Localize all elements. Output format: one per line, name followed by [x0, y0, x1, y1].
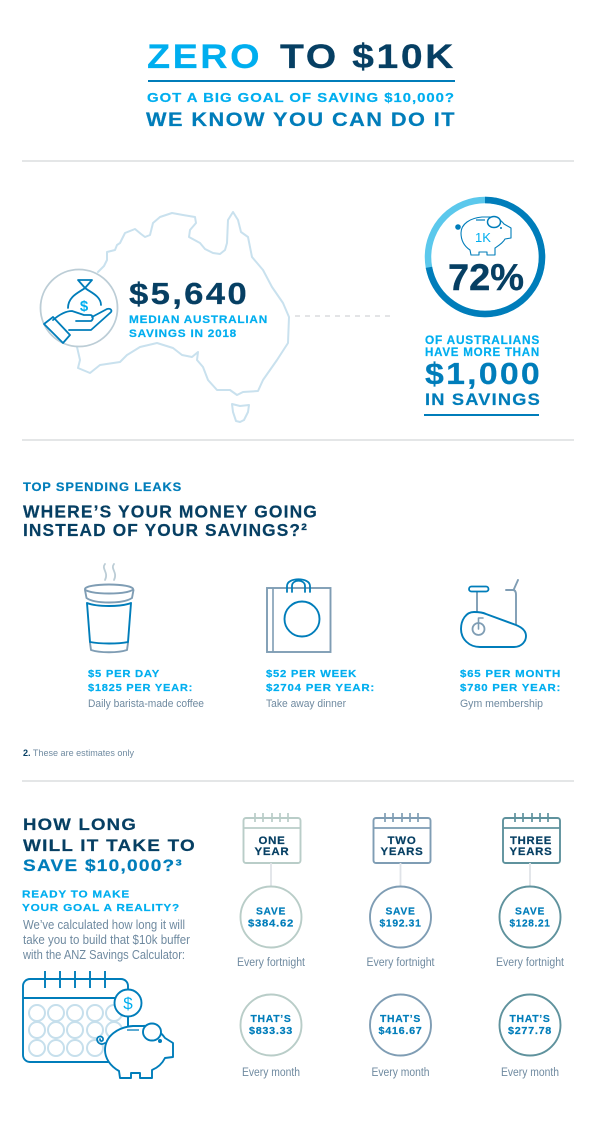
leak: gym: Gym membership [460, 698, 543, 710]
column: three years [496, 813, 565, 1079]
two years fortnightly saving: SAVE [386, 906, 416, 918]
icon: calendar three years: YEARS [510, 846, 552, 858]
savings statistic text: $1,000 [425, 356, 542, 391]
icon: hand holding money bag [40, 270, 118, 346]
three years monthly saving [500, 994, 560, 1079]
icon: shopping bag [267, 579, 330, 652]
three years fortnightly saving: SAVE [515, 906, 545, 918]
three years fortnightly saving: Every fortnight [496, 957, 565, 969]
median savings figure [129, 276, 268, 340]
leak: coffee: $1825 PER YEAR: [88, 682, 193, 694]
title: GOT A BIG GOAL OF SAVING $10,000? [147, 90, 455, 105]
leak: takeaway: Take away dinner [266, 698, 346, 710]
how long heading: HOW LONG [23, 816, 137, 834]
icon: calendar one year [244, 813, 300, 863]
three years monthly saving: THAT’S [510, 1013, 550, 1025]
icon: calendar two years [374, 813, 430, 863]
one year fortnightly saving: Every fortnight [237, 957, 306, 969]
two years monthly saving: THAT’S [380, 1013, 421, 1025]
icon: calendar with piggy bank: $ [123, 994, 133, 1013]
one year fortnightly saving: SAVE [256, 906, 286, 918]
leak: gym [460, 580, 561, 710]
spending leaks heading: TOP SPENDING LEAKS [23, 480, 182, 494]
intro text: with the ANZ Savings Calculator: [22, 948, 185, 962]
icon: calendar three years: THREE [510, 835, 552, 847]
title: ZERO [147, 38, 262, 76]
one year monthly saving: THAT’S [250, 1013, 292, 1025]
leak: gym: $65 PER MONTH [460, 668, 561, 680]
one year monthly saving: Every month [242, 1067, 300, 1079]
savings statistic text [424, 335, 542, 416]
icon: coffee cup [85, 564, 134, 652]
intro text: We’ve calculated how long it will [23, 918, 185, 932]
icon: calendar one year: ONE [258, 835, 286, 847]
title: TO $10K [280, 38, 456, 76]
savings statistic text: OF AUSTRALIANS [425, 335, 540, 347]
intro text [22, 888, 190, 962]
three years monthly saving: $277.78 [508, 1025, 552, 1037]
one year monthly saving: $833.33 [249, 1025, 293, 1037]
spending leaks heading [23, 480, 318, 540]
intro text: take you to build that $10k buffer [23, 933, 190, 947]
leak: takeaway: $52 PER WEEK [266, 668, 357, 680]
column: one year [237, 813, 306, 1079]
icon: calendar with piggy bank [23, 971, 173, 1078]
spending leaks heading: INSTEAD OF YOUR SAVINGS?² [23, 520, 308, 540]
spending leaks heading: WHERE’S YOUR MONEY GOING [23, 502, 318, 522]
icon: piggy bank: 1K [475, 230, 491, 245]
how long heading: WILL IT TAKE TO [23, 837, 196, 855]
one year fortnightly saving: $384.62 [248, 918, 294, 930]
median savings figure: MEDIAN AUSTRALIAN [129, 314, 268, 326]
icon: hand holding money bag: $ [80, 298, 89, 315]
two years monthly saving: $416.67 [378, 1025, 422, 1037]
three years monthly saving: Every month [501, 1067, 559, 1079]
ring chart: 72% [428, 200, 542, 314]
icon: exercise bike [461, 580, 526, 647]
icon: calendar two years: YEARS [380, 846, 424, 858]
column: two years [366, 813, 435, 1079]
two years monthly saving [370, 994, 431, 1079]
savings statistic text: HAVE MORE THAN [425, 347, 540, 359]
leak: coffee [85, 564, 204, 710]
median savings figure: $5,640 [129, 276, 249, 311]
savings statistic text: IN SAVINGS [425, 391, 541, 409]
leak: coffee: Daily barista-made coffee [88, 698, 204, 710]
icon: calendar two years: TWO [388, 835, 416, 847]
one year fortnightly saving [237, 886, 306, 969]
median savings figure: SAVINGS IN 2018 [129, 328, 237, 340]
footnote: 2. These are estimates only [23, 748, 134, 759]
title: WE KNOW YOU CAN DO IT [146, 109, 456, 131]
leak: coffee: $5 PER DAY [88, 668, 160, 680]
two years fortnightly saving [366, 886, 435, 969]
title [146, 38, 456, 131]
three years fortnightly saving [496, 886, 565, 969]
how long heading: SAVE $10,000?³ [23, 857, 183, 875]
icon: calendar one year: YEAR [254, 846, 290, 858]
two years fortnightly saving: Every fortnight [366, 957, 435, 969]
two years fortnightly saving: $192.31 [380, 918, 422, 930]
one year monthly saving [240, 994, 302, 1079]
map of Australia [77, 212, 289, 422]
leak: takeaway [266, 579, 375, 710]
two years monthly saving: Every month [372, 1067, 430, 1079]
icon: calendar three years [503, 813, 560, 863]
three years fortnightly saving: $128.21 [510, 918, 550, 930]
leak: takeaway: $2704 PER YEAR: [266, 682, 375, 694]
intro text: YOUR GOAL A REALITY? [22, 902, 180, 914]
ring chart: 72%: 72% [448, 257, 524, 298]
leak: gym: $780 PER YEAR: [460, 682, 561, 694]
intro text: READY TO MAKE [22, 888, 130, 900]
how long heading [23, 816, 196, 875]
